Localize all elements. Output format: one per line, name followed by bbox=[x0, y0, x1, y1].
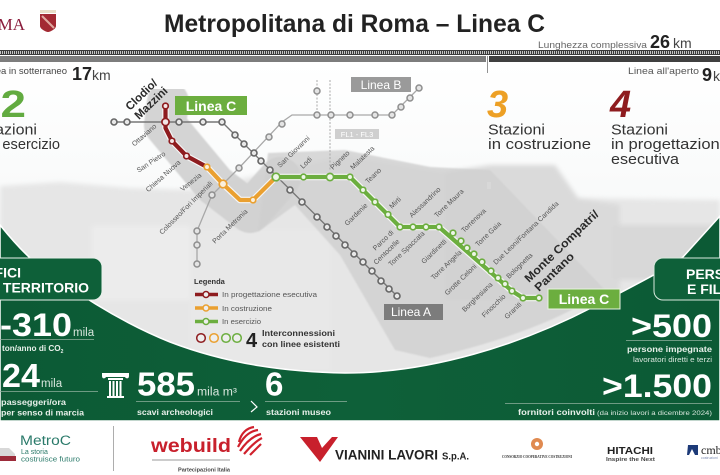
station names: Gardenie bbox=[344, 202, 369, 227]
open-air length: Linea all'aperto bbox=[628, 66, 699, 77]
line C route bbox=[166, 106, 539, 298]
legend item: in esercizio: In esercizio bbox=[222, 317, 261, 326]
logo: Hitachi bbox=[606, 446, 655, 463]
stat: stazioni museo: 6 bbox=[265, 366, 283, 402]
gray corridor band behind the route bbox=[165, 102, 605, 358]
station names: Ottaviano bbox=[131, 123, 158, 148]
terminus label: Clodio/Mazzini: Mazzini bbox=[133, 85, 170, 122]
tag: Linea A: Linea A bbox=[391, 305, 431, 319]
terminus label: Clodio/Mazzini bbox=[124, 77, 170, 122]
stat: CO2: 2 bbox=[61, 349, 64, 355]
stat: scavi archeologici bbox=[136, 366, 240, 417]
station names: Bolognetta bbox=[506, 252, 535, 280]
panel: benefici per il territorio bbox=[0, 258, 102, 300]
arrow: chevron bbox=[251, 401, 257, 412]
legend item: in progettazione esecutiva: In progettazione esecutiva bbox=[222, 290, 318, 299]
divider bbox=[112, 426, 114, 471]
header bars bbox=[0, 50, 720, 73]
logo: MetroC: MetroC bbox=[20, 433, 71, 448]
stat: scavi archeologici: mila m³ bbox=[197, 386, 237, 398]
stat: persone impegnate: lavoratori diretti e terzi bbox=[633, 357, 713, 364]
station names: Mirti bbox=[389, 196, 403, 210]
total length bbox=[538, 32, 692, 52]
legend item: in costruzione: In costruzione bbox=[222, 304, 272, 313]
legend item: in esercizio bbox=[195, 317, 261, 326]
station names: Parco di bbox=[372, 229, 396, 252]
legend: interconnessioni bbox=[197, 329, 340, 352]
logo: MetroC: costruisce futuro bbox=[21, 456, 80, 464]
logo: Vianini Lavori: S.p.A. bbox=[442, 450, 469, 462]
logo: webuild: webuild bbox=[150, 435, 231, 457]
tag: Linea C top bbox=[175, 96, 247, 115]
tag: Linea B: Linea B bbox=[361, 78, 401, 92]
logo: Vianini Lavori bbox=[300, 437, 469, 462]
tag: Linea A bbox=[384, 304, 443, 320]
stat: 4 stazioni in progettazione esecutiva: esecutiva bbox=[611, 151, 680, 168]
station names: Torre Gaia bbox=[475, 221, 503, 248]
station names: Lodi bbox=[300, 156, 314, 170]
stat: CO2: -310 bbox=[0, 307, 72, 343]
logo: Consorzio Cooperative Costruzioni: CONSORZIO COOPERATIVE COSTRUZIONI bbox=[502, 454, 572, 459]
title: Metropolitana di Roma – Linea C bbox=[164, 10, 545, 38]
total length: km bbox=[673, 35, 692, 51]
stat: fornitori coinvolti bbox=[505, 368, 712, 417]
stat: 3 stazioni in costruzione bbox=[487, 84, 591, 153]
stat: persone impegnate bbox=[626, 308, 713, 364]
station names: Torre Angela bbox=[430, 249, 463, 282]
station names: Due Leoni/Fontana Candida bbox=[493, 201, 560, 266]
logo: webuild: Partecipazioni Italia bbox=[178, 468, 230, 474]
tag: Linea B bbox=[351, 77, 411, 92]
tag: FL1 - FL3: FL1 - FL3 bbox=[341, 130, 373, 139]
logo: Hitachi: HITACHI bbox=[607, 446, 653, 457]
stat: fornitori coinvolti: fornitori coinvolti bbox=[518, 408, 595, 417]
stat: 3 stazioni in costruzione: Stazioni bbox=[488, 122, 545, 138]
stat: passeggeri/ora bbox=[0, 357, 98, 418]
stat: persone impegnate: persone impegnate bbox=[627, 345, 712, 354]
stat: CO2 bbox=[0, 307, 95, 355]
line B and FL network (gray) bbox=[194, 80, 422, 267]
station names: Centocelle bbox=[373, 238, 401, 266]
stat: 4 stazioni in progettazione esecutiva: 4 bbox=[609, 84, 631, 126]
logo: Vianini Lavori: VIANINI LAVORI bbox=[335, 446, 438, 462]
segment: in progettazione esecutiva bbox=[166, 106, 207, 167]
station names: Torre Maura bbox=[434, 188, 466, 219]
stat: 4 stazioni in progettazione esecutiva: Stazioni bbox=[611, 122, 668, 138]
underground length bbox=[0, 64, 111, 84]
station names: Graniti bbox=[504, 301, 524, 321]
station names: Malatesta bbox=[350, 145, 376, 171]
station names: San Pietro bbox=[136, 151, 167, 174]
station names: Borghesiana bbox=[461, 281, 494, 314]
stat: passeggeri/ora: 24 bbox=[2, 357, 41, 394]
stat: fornitori coinvolti: >1.500 bbox=[602, 368, 712, 404]
total length: 26 bbox=[650, 32, 670, 52]
logo: Consorzio Cooperative Costruzioni bbox=[502, 438, 572, 459]
stat: CO2: ton/anno di CO bbox=[2, 344, 61, 353]
tag: Linea C bottom: Linea C bbox=[559, 291, 609, 307]
terminus label: Clodio/Mazzini: Clodio/ bbox=[124, 77, 161, 113]
legend: interconnessioni: 4 bbox=[246, 330, 258, 352]
legend: interconnessioni: Interconnessioni bbox=[262, 329, 335, 338]
stat: scavi archeologici: 585 bbox=[137, 366, 195, 402]
terminus label: Monte Compatri/Pantano: Monte Compatri/ bbox=[523, 208, 602, 285]
background: washed-out Rome photo bbox=[0, 62, 720, 390]
logo: MetroC bbox=[0, 433, 80, 464]
station names: Torre Spaccata bbox=[388, 230, 426, 268]
station names: San Giovanni bbox=[277, 135, 312, 169]
open-air length bbox=[628, 65, 720, 85]
underground length: km bbox=[92, 67, 111, 83]
stat: 22 stazioni in esercizio bbox=[0, 84, 60, 153]
stat: 3 stazioni in costruzione: in costruzione bbox=[488, 136, 591, 153]
stat: 3 stazioni in costruzione: 3 bbox=[487, 84, 508, 126]
stat: scavi archeologici: scavi archeologici bbox=[137, 408, 213, 417]
segment: in esercizio bbox=[276, 177, 539, 298]
legend bbox=[194, 277, 340, 352]
stat: 4 stazioni in progettazione esecutiva: in progettazione bbox=[611, 136, 720, 153]
stat: passeggeri/ora: passeggeri/ora bbox=[1, 398, 66, 407]
tag: Linea C top: Linea C bbox=[186, 98, 236, 114]
station names: Giardinetti bbox=[421, 238, 449, 266]
station names: Finocchio bbox=[481, 293, 507, 319]
station names: Alessandrino bbox=[409, 186, 443, 219]
station names: Colosseo/Fori Imperiali bbox=[159, 180, 215, 236]
total length: Lunghezza complessiva bbox=[538, 40, 648, 51]
legend: interconnessioni: con linee esistenti bbox=[262, 340, 340, 349]
tag: FL1 - FL3 bbox=[335, 129, 379, 139]
logo: cmb bbox=[687, 443, 720, 460]
station names: Teano bbox=[365, 167, 383, 185]
stat: CO2: mila bbox=[73, 327, 95, 339]
stat: persone impegnate: >500 bbox=[631, 308, 712, 344]
underground length: 17 bbox=[72, 64, 92, 84]
legend item: in costruzione bbox=[195, 304, 272, 313]
line A (dark gray) bbox=[111, 119, 400, 299]
legend: Legenda bbox=[194, 277, 226, 286]
logo: MetroC: La storia bbox=[21, 449, 48, 456]
green lower band bbox=[0, 216, 720, 421]
stat: 4 stazioni in progettazione esecutiva bbox=[609, 84, 720, 168]
terminus label: Monte Compatri/Pantano: Pantano bbox=[533, 251, 577, 294]
line C stations bbox=[162, 103, 542, 301]
tag: Linea C bottom bbox=[548, 289, 620, 309]
station names: Porta Metronia bbox=[211, 208, 249, 245]
panel: persone e filiera bbox=[654, 258, 720, 300]
logo: Hitachi: Inspire the Next bbox=[606, 457, 655, 463]
stat: fornitori coinvolti: (da inizio lavori a dicembre 2024) bbox=[597, 410, 712, 417]
station names: Torrenova bbox=[461, 208, 488, 234]
icon: ionic column bbox=[102, 373, 129, 398]
logo: Roma shield bbox=[40, 10, 56, 32]
station names bbox=[131, 123, 560, 321]
stat: stazioni museo bbox=[265, 366, 347, 417]
logo: cmb: costruzioni bbox=[701, 456, 718, 460]
stat: stazioni museo: stazioni museo bbox=[266, 408, 331, 417]
station names: Grotte Celoni bbox=[444, 263, 479, 297]
station names: Pigneto bbox=[330, 150, 352, 171]
segment: in costruzione bbox=[207, 167, 276, 200]
logo: webuild bbox=[150, 427, 262, 474]
stat: passeggeri/ora: per senso di marcia bbox=[1, 408, 84, 418]
station names: Chiesa Nuova bbox=[145, 159, 182, 194]
open-air length: 9 bbox=[702, 65, 712, 85]
stat: passeggeri/ora: mila bbox=[41, 378, 63, 390]
station names: Venezia bbox=[179, 172, 203, 193]
